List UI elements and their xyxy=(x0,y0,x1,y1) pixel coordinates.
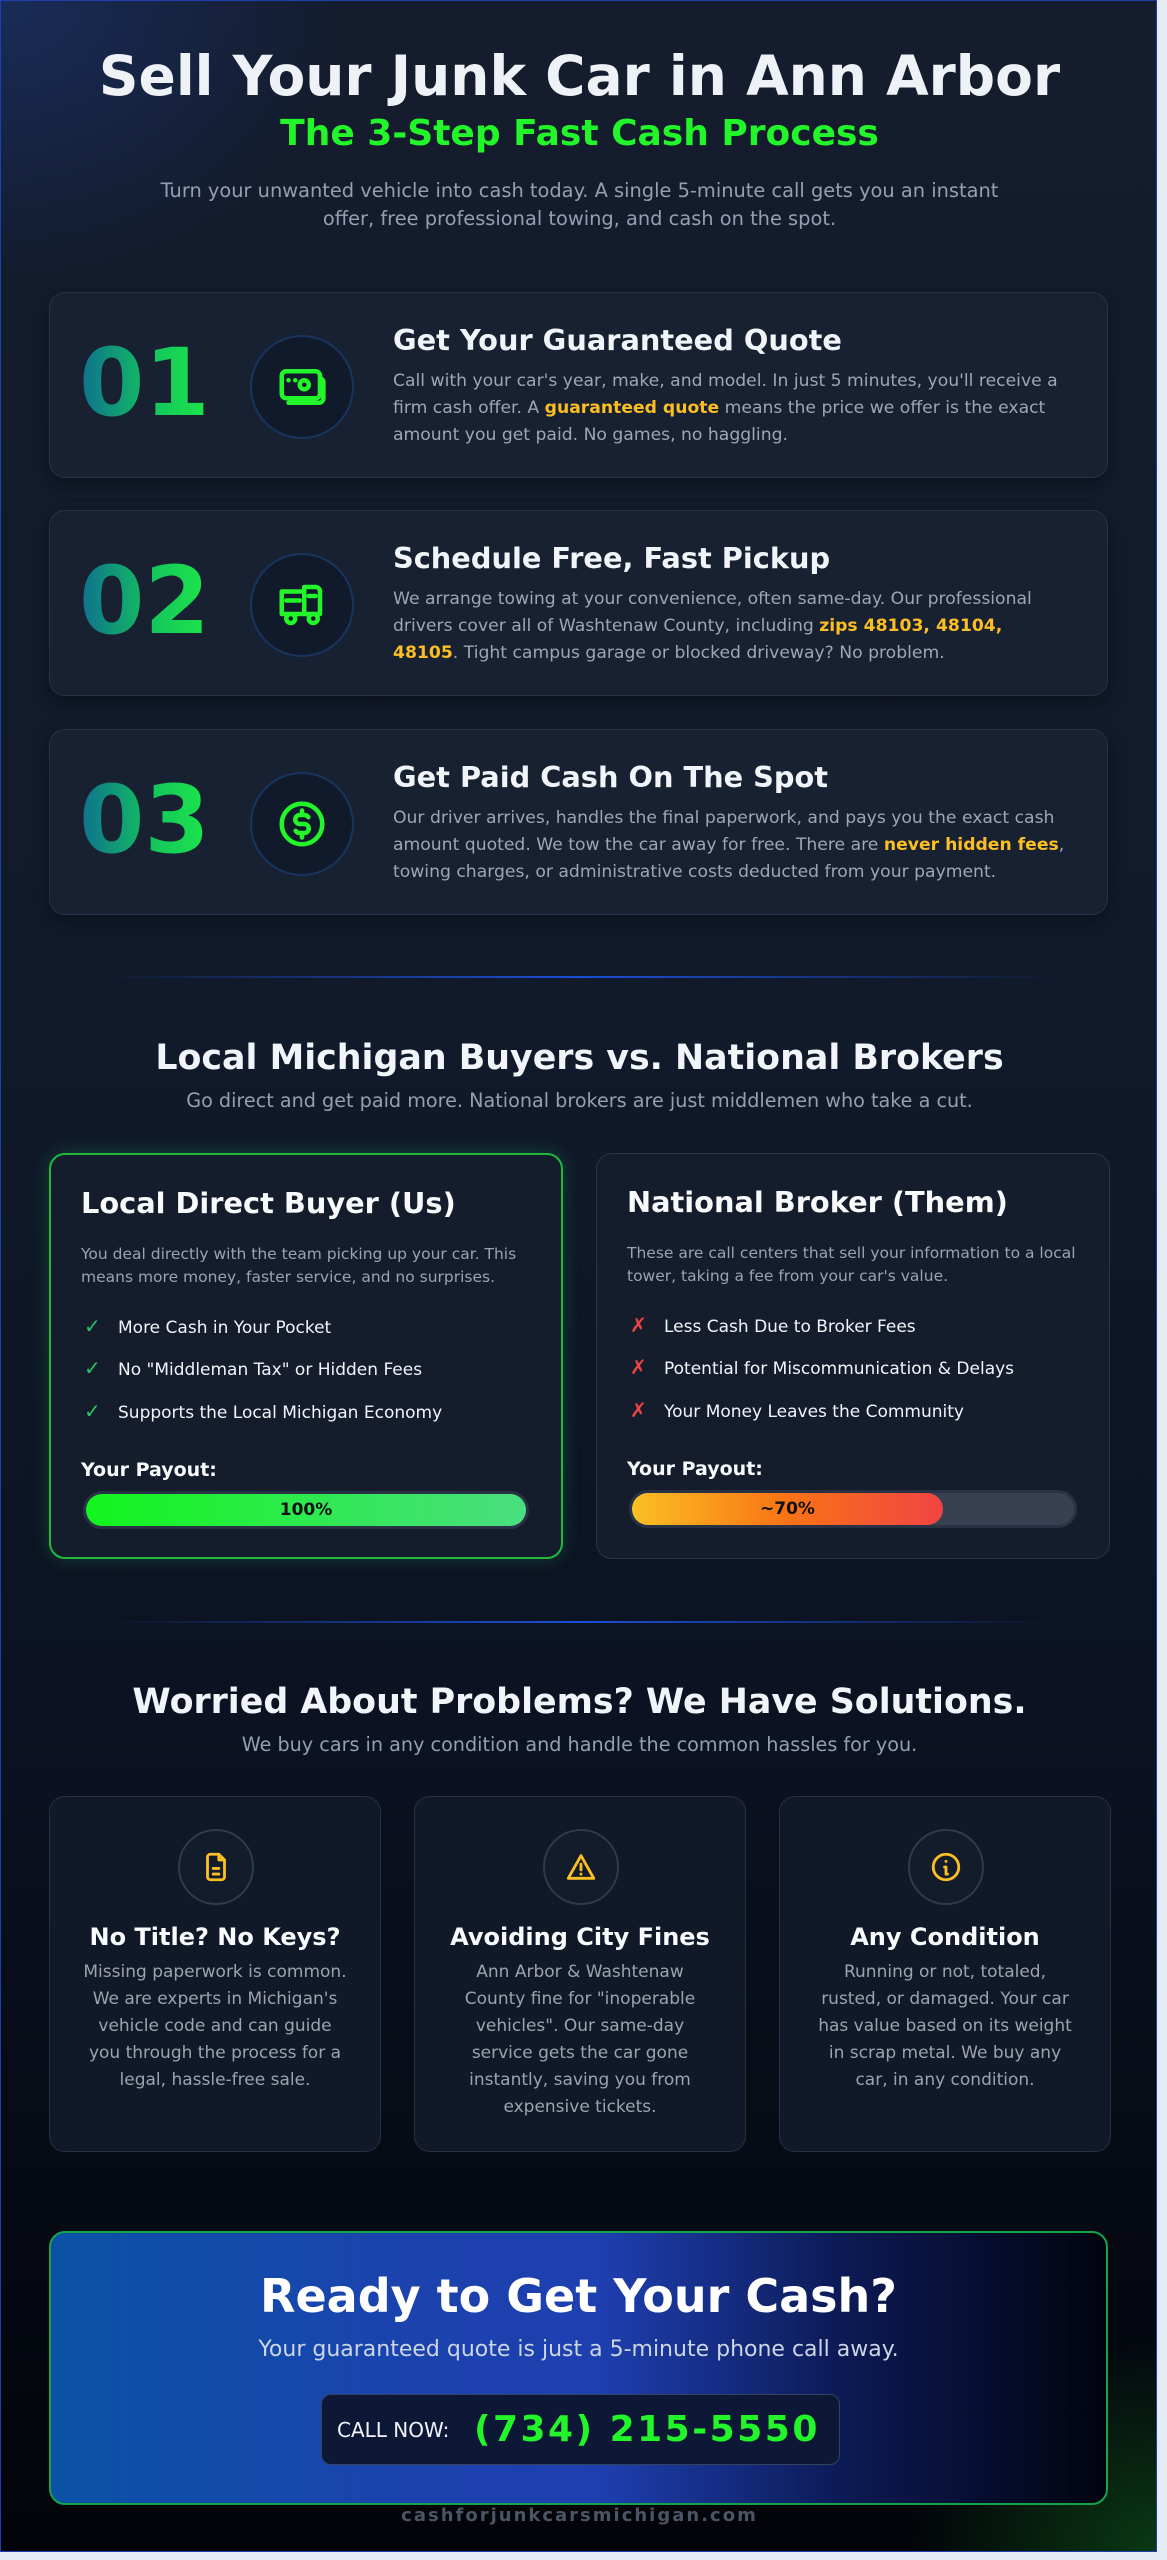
drawback list: ✗ xyxy=(630,1313,647,1337)
payout label: Your Payout: xyxy=(81,1459,217,1481)
intro text: offer, free professional towing, and cash on the spot. xyxy=(323,207,836,230)
step heading: Get Paid Cash On The Spot xyxy=(393,760,828,794)
phone box: (734) 215-5550 xyxy=(474,2409,820,2450)
drawback list: ✗ xyxy=(630,1355,647,1379)
card text xyxy=(465,1962,695,2117)
card text: expensive tickets. xyxy=(503,2097,657,2117)
panel: step 1 xyxy=(49,292,1108,478)
step number 03: 03 xyxy=(79,766,210,875)
benefit list: ✓ xyxy=(84,1356,101,1380)
card text: vehicle code and can guide xyxy=(98,2016,332,2036)
panel: city fines xyxy=(414,1796,746,2152)
phone box: CALL NOW: xyxy=(337,2418,449,2442)
card text: Missing paperwork is common. xyxy=(83,1962,347,1982)
card text: legal, hassle-free sale. xyxy=(120,2070,310,2090)
panel: local direct buyer xyxy=(49,1153,563,1559)
step body: towing charges, or administrative costs deducted from your payment. xyxy=(393,862,996,882)
subtitle: The 3-Step Fast Cash Process xyxy=(280,113,879,154)
card text: Ann Arbor & Washtenaw xyxy=(476,1962,684,1982)
card description xyxy=(626,1244,1076,1285)
card text: Running or not, totaled, xyxy=(844,1962,1046,1982)
bar: 70% xyxy=(629,1490,1077,1528)
drawback list: Your Money Leaves the Community xyxy=(664,1402,964,1422)
step body: 48105. Tight campus garage or blocked driveway? No problem. xyxy=(393,643,945,663)
step body: Call with your car's year, make, and model. In just 5 minutes, you'll receive a xyxy=(393,371,1058,391)
subheading: solutions: We buy cars in any condition and handle the common hassles for you. xyxy=(242,1733,917,1756)
footer url: cashforjunkcarsmichigan.com xyxy=(401,2505,758,2526)
heading: comparison: Local Michigan Buyers vs. National Brokers xyxy=(155,1038,1004,1078)
step body: firm cash offer. A guaranteed quote means the price we offer is the exact xyxy=(393,398,1045,418)
drawback list: Less Cash Due to Broker Fees xyxy=(664,1317,916,1337)
bar: 100%: 100% xyxy=(280,1500,332,1520)
panel: step 3 xyxy=(49,729,1108,915)
panel: no title xyxy=(49,1796,381,2152)
icon: document xyxy=(178,1829,254,1905)
card text: in scrap metal. We buy any xyxy=(829,2043,1061,2063)
panel: call to action xyxy=(49,2231,1108,2505)
drawback list: ✗ xyxy=(630,1398,647,1422)
card text: service gets the car gone xyxy=(472,2043,688,2063)
card description: means more money, faster service, and no surprises. xyxy=(81,1268,495,1286)
card text: instantly, saving you from xyxy=(469,2070,691,2090)
step body: drivers cover all of Washtenaw County, including zips 48103, 48104, xyxy=(393,616,1002,636)
step body xyxy=(393,808,1064,882)
step number 01: 01 xyxy=(79,329,210,438)
intro text xyxy=(160,179,998,230)
drawback list: Potential for Miscommunication & Delays xyxy=(664,1359,1014,1379)
card description: tower, taking a fee from your car's value. xyxy=(627,1267,948,1285)
drawback list xyxy=(630,1313,1014,1422)
card heading: Local Direct Buyer (Us) xyxy=(81,1186,456,1220)
card text xyxy=(818,1962,1072,2090)
bar: 70%: ~70% xyxy=(760,1499,815,1519)
card description: You deal directly with the team picking up your car. This xyxy=(81,1245,516,1263)
card text: you through the process for a xyxy=(89,2043,341,2063)
benefit list: More Cash in Your Pocket xyxy=(118,1318,331,1338)
panel: step 2 xyxy=(49,510,1108,696)
card heading: National Broker (Them) xyxy=(627,1185,1008,1219)
benefit list: Supports the Local Michigan Economy xyxy=(118,1403,442,1423)
card text: vehicles". Our same-day xyxy=(476,2016,684,2036)
icon: cash xyxy=(250,335,354,439)
card description xyxy=(81,1245,516,1286)
subheading: comparison: Go direct and get paid more. National brokers are just middlemen who take a cut. xyxy=(186,1089,973,1112)
benefit list xyxy=(84,1314,442,1423)
card text: County fine for "inoperable xyxy=(465,1989,695,2009)
step heading: Get Your Guaranteed Quote xyxy=(393,323,842,357)
title: Sell Your Junk Car in Ann Arbor xyxy=(99,44,1060,108)
card text: car, in any condition. xyxy=(855,2070,1035,2090)
card text: rusted, or damaged. Your car xyxy=(821,1989,1069,2009)
step body: We arrange towing at your convenience, often same-day. Our professional xyxy=(393,589,1032,609)
icon: info xyxy=(908,1829,984,1905)
CTA heading: Ready to Get Your Cash? xyxy=(260,2269,897,2323)
step number 02: 02 xyxy=(79,547,210,656)
benefit list: ✓ xyxy=(84,1399,101,1423)
card text: We are experts in Michigan's xyxy=(93,1989,337,2009)
card text: has value based on its weight xyxy=(818,2016,1072,2036)
card text xyxy=(83,1962,347,2090)
panel: any condition xyxy=(779,1796,1111,2152)
CTA subtext: Your guaranteed quote is just a 5-minute phone call away. xyxy=(258,2337,899,2362)
heading: solutions: Worried About Problems? We Have Solutions. xyxy=(132,1682,1027,1722)
step body xyxy=(393,589,1032,663)
benefit list: No "Middleman Tax" or Hidden Fees xyxy=(118,1360,422,1380)
panel: national broker xyxy=(596,1153,1110,1559)
card description: These are call centers that sell your information to a local xyxy=(627,1244,1076,1262)
icon: tow truck xyxy=(250,553,354,657)
intro text: Turn your unwanted vehicle into cash today. A single 5-minute call gets you an instant xyxy=(161,179,998,202)
step body: amount quoted. We tow the car away for free. There are never hidden fees, xyxy=(393,835,1064,855)
payout label: Your Payout: xyxy=(627,1458,763,1480)
card title: Avoiding City Fines xyxy=(450,1923,710,1951)
icon: warning xyxy=(543,1829,619,1905)
phone box xyxy=(321,2394,840,2465)
card title: Any Condition xyxy=(850,1923,1040,1951)
step body: Our driver arrives, handles the final paperwork, and pays you the exact cash xyxy=(393,808,1054,828)
benefit list: ✓ xyxy=(84,1314,101,1338)
step body xyxy=(393,371,1058,445)
step body: amount you get paid. No games, no haggling. xyxy=(393,425,788,445)
step heading: Schedule Free, Fast Pickup xyxy=(393,541,830,575)
icon: dollar xyxy=(250,772,354,876)
card title: No Title? No Keys? xyxy=(89,1923,340,1951)
bar: 100% xyxy=(83,1491,529,1529)
